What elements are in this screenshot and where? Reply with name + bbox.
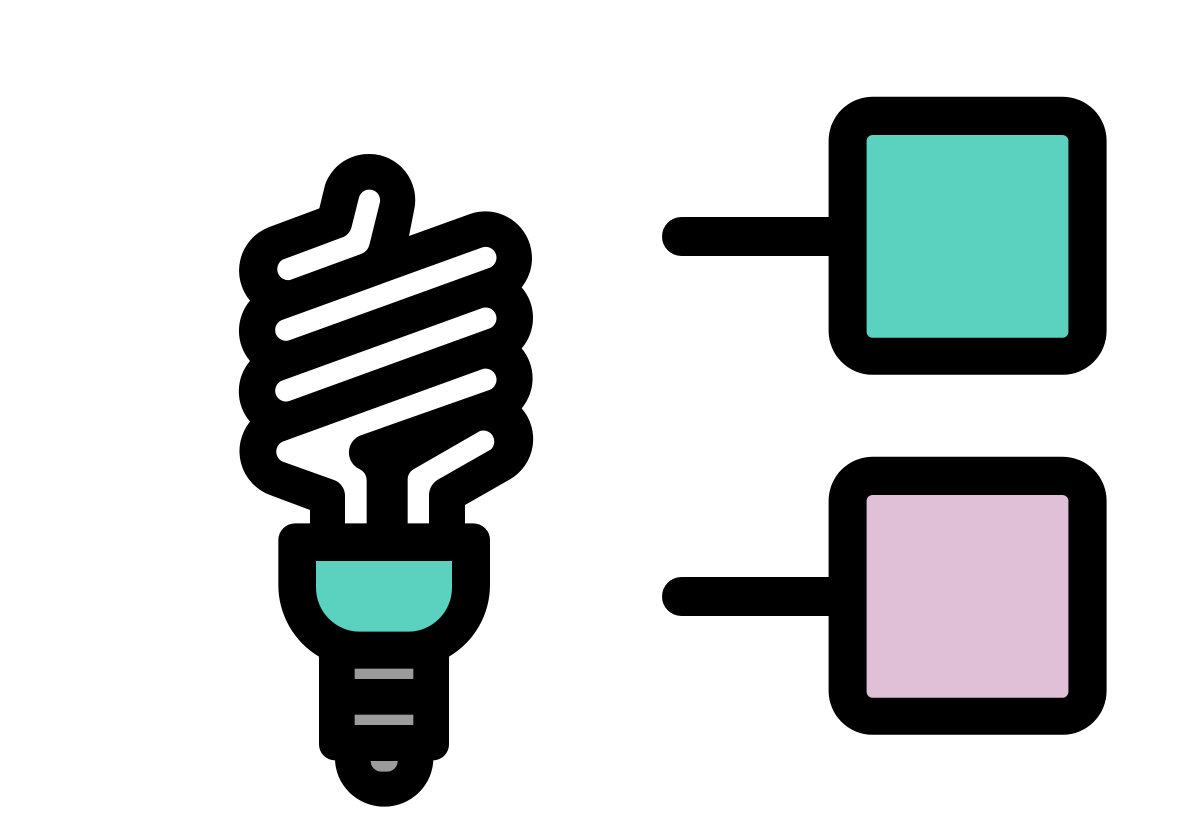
box frame	[829, 457, 1107, 735]
teal collar	[316, 561, 452, 632]
teal swatch	[867, 135, 1068, 338]
connector line	[682, 577, 840, 616]
icon: spiral light bulb	[239, 154, 533, 807]
callout: teal box with connector	[682, 97, 1107, 375]
box frame	[829, 97, 1107, 375]
pink swatch	[867, 495, 1068, 698]
screw thread bars	[355, 669, 413, 772]
bulb base	[278, 523, 490, 807]
callout: pink box with connector	[682, 457, 1107, 735]
bulb spiral coil	[239, 154, 533, 527]
connector line	[682, 217, 840, 256]
